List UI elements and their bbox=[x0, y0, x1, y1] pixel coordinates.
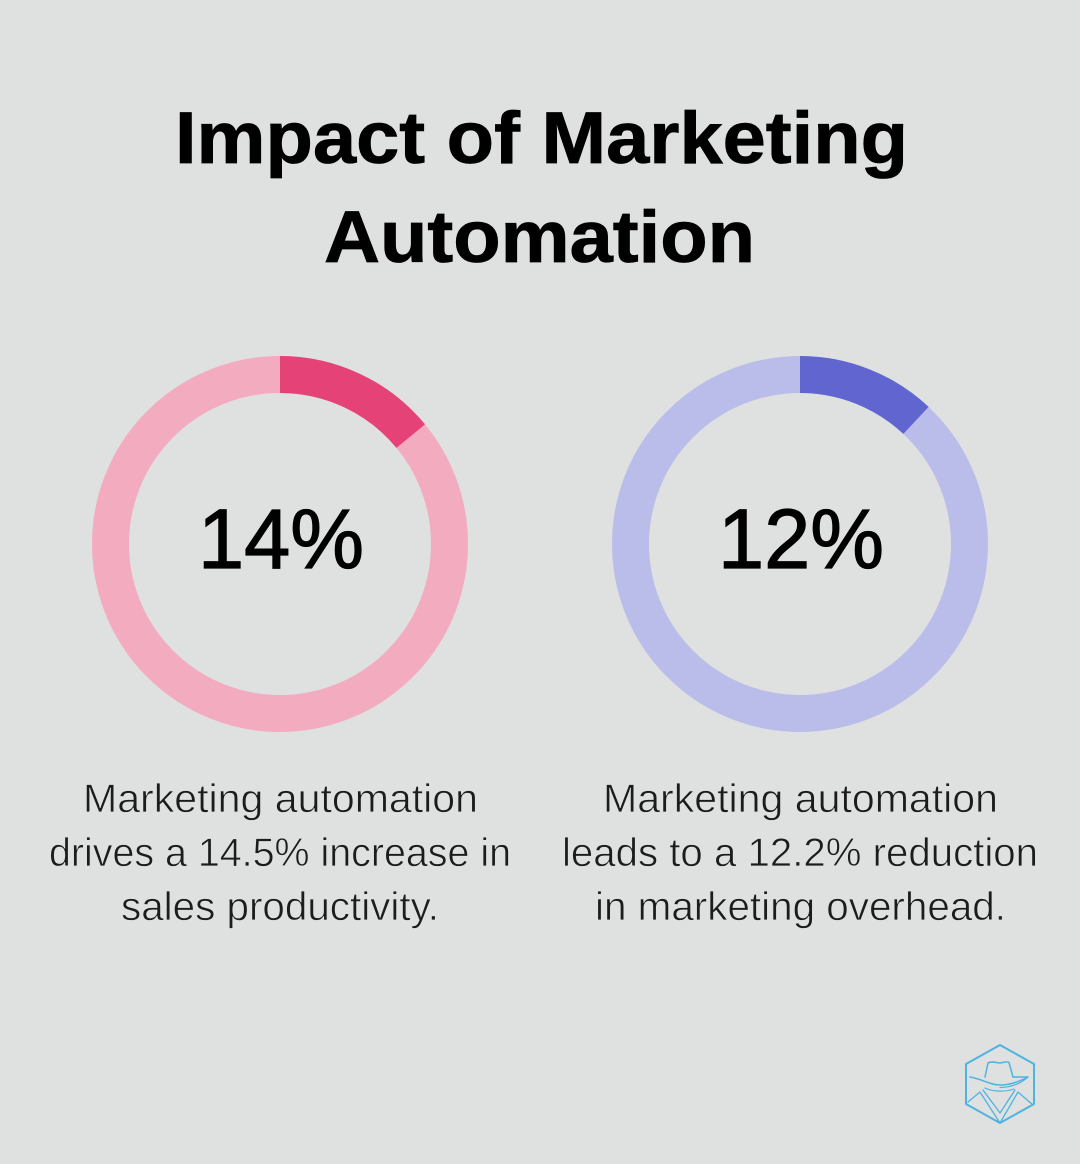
description: sales productivity: sales productivity. bbox=[121, 885, 439, 929]
description: marketing overhead: leads to a 12.2% reduction bbox=[562, 831, 1038, 875]
title: Impact of Marketing bbox=[175, 98, 908, 179]
description: sales productivity: Marketing automation bbox=[83, 777, 478, 821]
icon: spy hat logo bbox=[966, 1045, 1034, 1123]
description: marketing overhead bbox=[562, 777, 1038, 929]
donut chart: 14% bbox=[110, 374, 450, 714]
description: marketing overhead: Marketing automation bbox=[603, 777, 998, 821]
description: sales productivity: drives a 14.5% increase in bbox=[49, 831, 511, 875]
description: marketing overhead: in marketing overhead. bbox=[595, 885, 1006, 929]
value: 12%: 12% bbox=[718, 492, 884, 586]
title: Automation bbox=[324, 197, 755, 278]
donut chart: 12% bbox=[630, 374, 970, 714]
title bbox=[175, 98, 908, 278]
description: sales productivity bbox=[49, 777, 511, 929]
panel: sales productivity bbox=[49, 374, 511, 929]
value: 14%: 14% bbox=[198, 492, 364, 586]
panel: marketing overhead bbox=[562, 374, 1038, 929]
